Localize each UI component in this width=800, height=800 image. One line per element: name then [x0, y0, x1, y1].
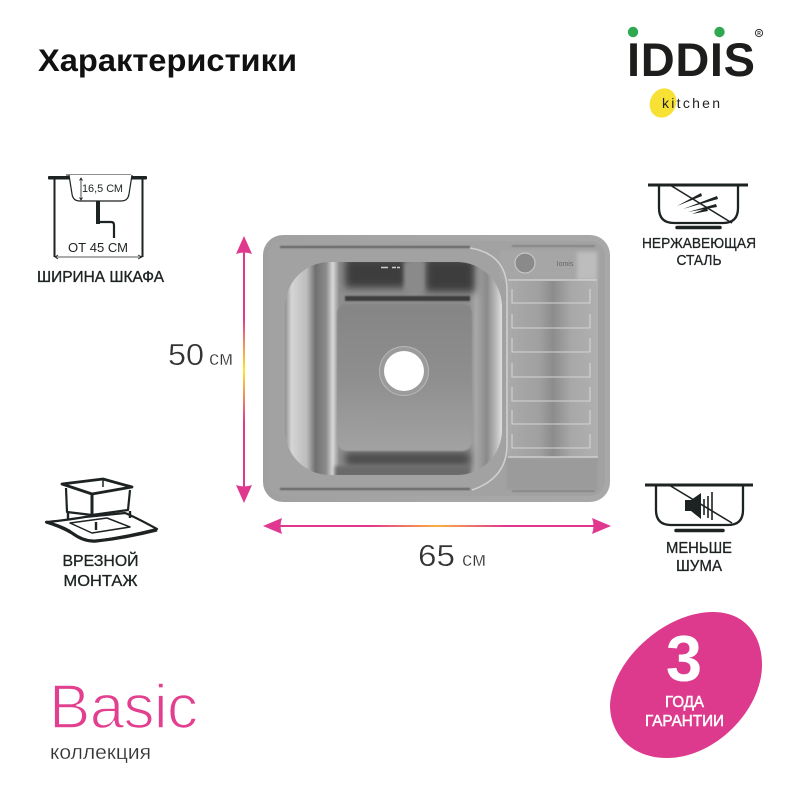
collection name: Basic — [49, 673, 198, 742]
sink photo — [263, 235, 610, 502]
label: less noise line 2: ШУМА — [676, 558, 723, 575]
width value — [418, 538, 486, 573]
label: stainless steel line 2: СТАЛЬ — [676, 252, 722, 269]
icon: cabinet width — [48, 175, 147, 259]
warranty badge: 3 — [666, 622, 702, 695]
icon: cabinet width: ОТ 45 СМ — [68, 241, 128, 255]
logo: IDDIS kitchen: IDDIS — [627, 33, 755, 86]
dimension arrow: height — [236, 236, 252, 503]
logo: IDDIS kitchen — [627, 27, 763, 122]
icon: cabinet width: 16,5 СМ — [82, 183, 123, 195]
label: stainless steel: НЕРЖАВЕЮЩАЯ — [642, 235, 756, 252]
label: cabinet width: ШИРИНА ШКАФА — [37, 269, 164, 286]
height value: см — [209, 348, 233, 370]
sink photo: Iomis — [557, 261, 574, 268]
dimension arrow: width — [263, 518, 611, 534]
warranty badge: ГОДА — [665, 694, 705, 711]
height value: 50 — [168, 337, 204, 372]
width value: см — [462, 549, 486, 571]
label: less noise: МЕНЬШЕ — [666, 540, 732, 557]
logo: IDDIS kitchen: R — [757, 31, 761, 37]
drainer — [500, 250, 598, 280]
label: flush mount line 2: МОНТАЖ — [64, 573, 138, 590]
collection label: коллекция — [50, 742, 151, 764]
warranty badge — [610, 612, 762, 758]
width value: 65 — [418, 538, 455, 573]
logo: IDDIS kitchen: kitchen — [662, 95, 720, 111]
bowl — [285, 262, 502, 475]
icon: less noise — [645, 485, 753, 530]
label: flush mount: ВРЕЗНОЙ — [62, 551, 138, 570]
title: Характеристики — [38, 42, 297, 78]
icon: flush mount — [46, 479, 157, 541]
warranty badge: ГАРАНТИИ — [645, 713, 724, 730]
height value — [168, 337, 233, 372]
icon: stainless steel — [648, 185, 748, 228]
